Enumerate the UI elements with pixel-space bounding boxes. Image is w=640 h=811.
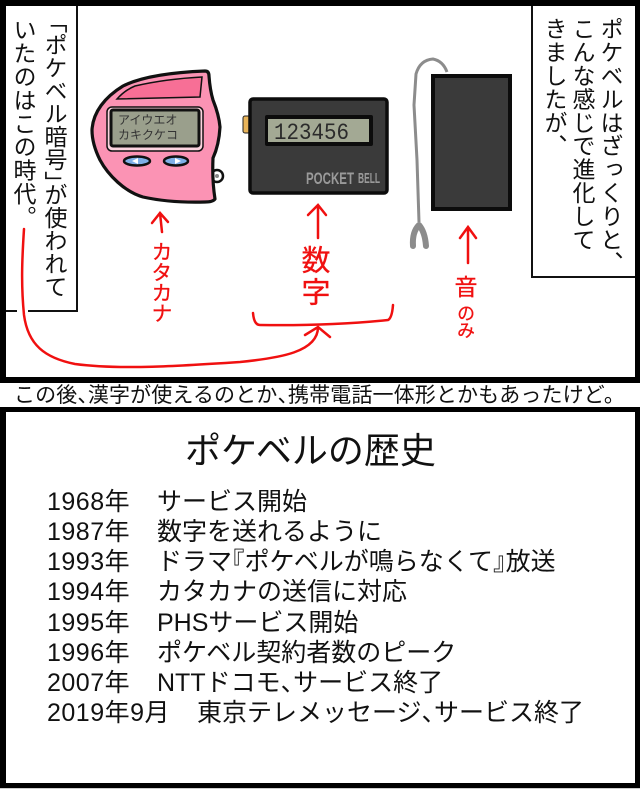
- icon: sound-only pager with earphone: [413, 59, 510, 246]
- arrow: to katakana pager: [152, 213, 168, 232]
- icon: black numeric pager: 123456: [274, 120, 349, 146]
- caption text: evolution: [539, 17, 629, 274]
- label: sound only: [449, 275, 483, 338]
- timeline list: ポケベル契約者数のピーク: [157, 639, 456, 667]
- row 1987: [47, 518, 382, 546]
- row 1993: [47, 548, 556, 576]
- icon: pink katakana pager: カキクケコ: [118, 126, 178, 143]
- gap in caption border where the red line crosses: [17, 310, 28, 312]
- icon: black numeric pager: BELL: [358, 170, 380, 187]
- row 1968: [47, 488, 307, 516]
- timeline list: NTTドコモ、サービス終了: [157, 669, 443, 697]
- caption line: this era: いたのはこの時代。: [8, 18, 42, 229]
- bracket under numeric label: [253, 305, 393, 325]
- arrow: curved link from caption to bracket: [22, 229, 330, 367]
- caption box: right: [531, 6, 635, 278]
- caption text: evolution: きましたが、: [539, 17, 573, 157]
- caption line: pocket bell code: 「ポケベル暗号 」 が使われて: [39, 10, 73, 298]
- row 2019: [47, 699, 584, 727]
- arrow: to sound-only pager: [460, 227, 476, 263]
- timeline list: 1995年: [47, 609, 130, 637]
- panel: pager evolution comic: [0, 0, 640, 383]
- icon: black numeric pager: POCKET: [306, 169, 354, 188]
- icon: pink katakana pager: アイウエオ: [118, 111, 177, 128]
- timeline list: サービス開始: [157, 488, 307, 516]
- timeline list: 東京テレメッセージ、サービス終了: [197, 699, 584, 727]
- timeline list: ドラマ『ポケベルが鳴らなくて』放送: [157, 548, 556, 576]
- caption text: evolution: こんな感じで進化して: [567, 17, 601, 251]
- label: katakana: カタカナ: [147, 241, 177, 323]
- panel interior: [6, 6, 635, 377]
- row 1995: [47, 609, 358, 637]
- row 1994: [47, 578, 407, 606]
- timeline list: 1987年: [47, 518, 130, 546]
- timeline list: 1993年: [47, 548, 130, 576]
- timeline list: カタカナの送信に対応: [157, 578, 407, 606]
- label: sound only: 音: [449, 275, 483, 298]
- caption strip: この後、漢字が使えるのとか、携帯電話一体形とかもあったけど。: [14, 384, 625, 407]
- timeline list: [47, 488, 584, 727]
- label: sound only: のみ: [453, 304, 479, 338]
- timeline list: 1996年: [47, 639, 130, 667]
- icon: black numeric pager: [243, 99, 387, 193]
- label: digits: 数字: [295, 245, 337, 309]
- row 1996: [47, 639, 456, 667]
- illustrations and red annotations: [20, 58, 512, 368]
- heading: ポケベルの歴史: [185, 430, 436, 471]
- icon: pink katakana pager: [92, 71, 223, 202]
- caption text: evolution: ポケベルはざっくりと、: [595, 17, 629, 274]
- timeline list: 1994年: [47, 578, 130, 606]
- row 2007: [47, 669, 443, 697]
- timeline list: 2019年9月: [47, 699, 170, 727]
- panel: history: [0, 407, 640, 788]
- caption box: left: [6, 6, 78, 312]
- timeline list: 数字を送れるように: [157, 518, 382, 546]
- bottom edge line: [0, 788, 640, 789]
- timeline list: 1968年: [47, 488, 130, 516]
- timeline list: PHSサービス開始: [157, 609, 358, 637]
- timeline list: 2007年: [47, 669, 130, 697]
- arrow: to numeric pager: [308, 205, 326, 238]
